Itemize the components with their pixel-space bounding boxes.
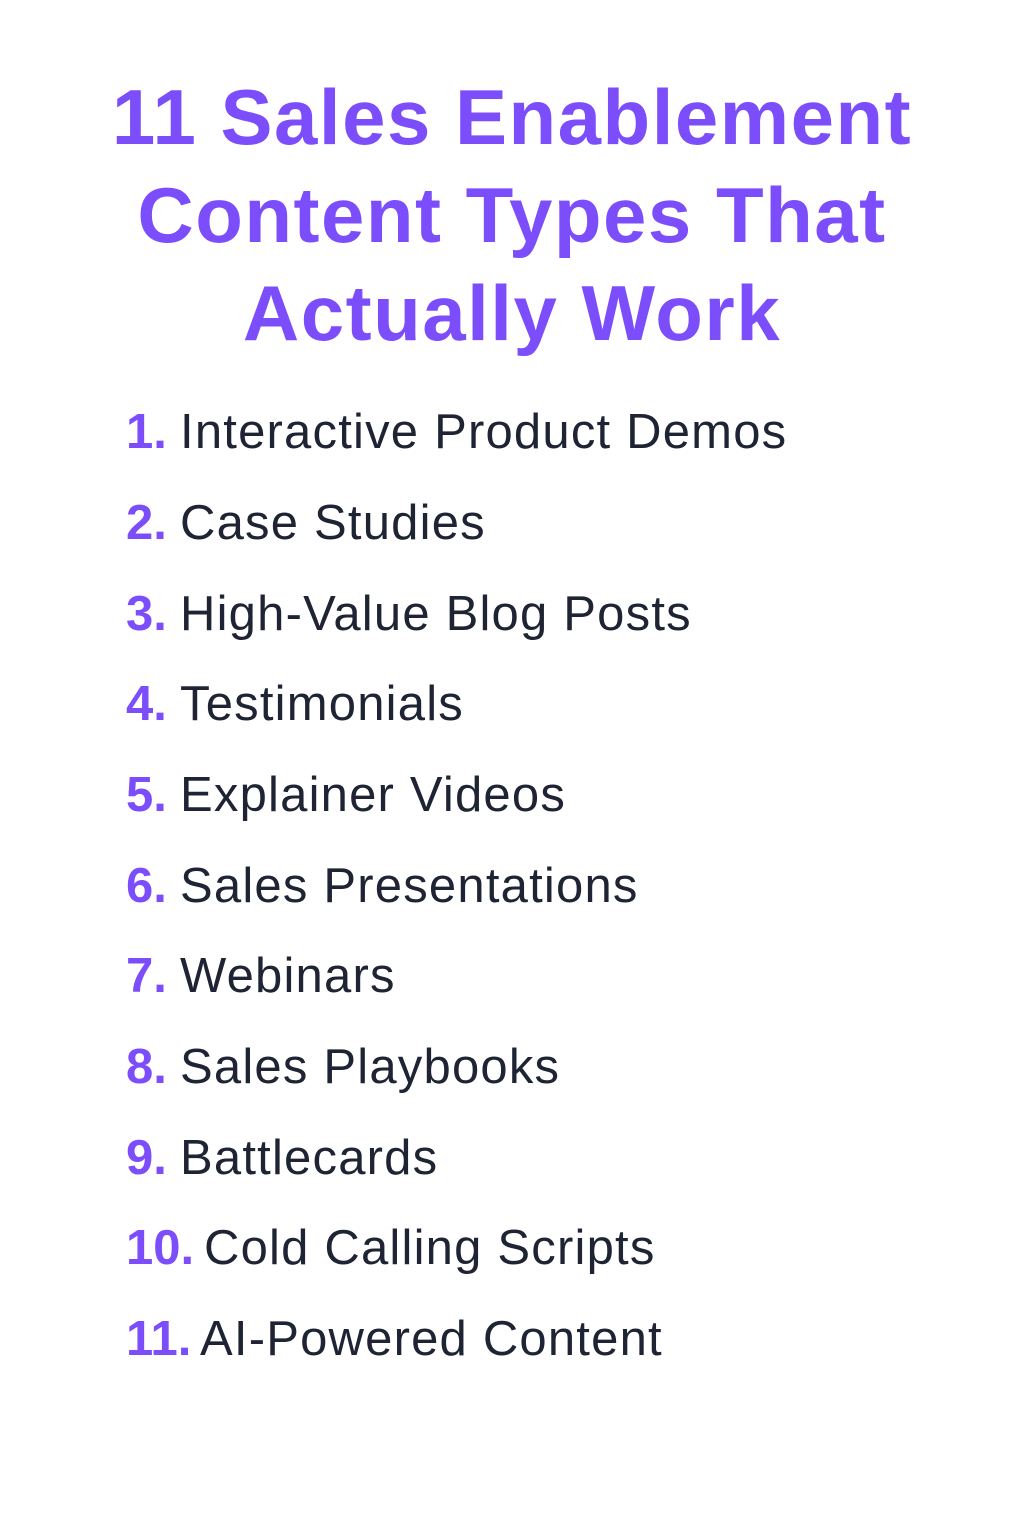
item 8: 8. [126,1040,167,1094]
item 5: Explainer Videos [180,768,566,822]
item 9: Battlecards [180,1131,438,1185]
item 9: 9. [126,1131,167,1185]
item 7: 7. [126,949,167,1003]
title [112,73,912,357]
item 5: 5. [126,768,167,822]
item 3: High-Value Blog Posts [180,587,692,641]
item 1: Interactive Product Demos [180,405,787,459]
item 1: 1. [126,405,167,459]
item 10: 10. [126,1221,194,1275]
item 4: 4. [126,677,167,731]
item 3: 3. [126,587,167,641]
list: content types [126,405,787,1366]
item 6: Sales Presentations [180,859,639,913]
item 6: 6. [126,859,167,913]
title: 11 Sales Enablement [112,73,912,161]
item 11: 11. [126,1312,191,1366]
title: Actually Work [243,269,781,357]
item 2: Case Studies [180,496,486,550]
item 7: Webinars [180,949,396,1003]
item 2: 2. [126,496,167,550]
item 11: AI-Powered Content [200,1312,663,1366]
item 4: Testimonials [180,677,464,731]
title: Content Types That [137,171,887,259]
item 8: Sales Playbooks [180,1040,560,1094]
item 10: Cold Calling Scripts [204,1221,656,1275]
